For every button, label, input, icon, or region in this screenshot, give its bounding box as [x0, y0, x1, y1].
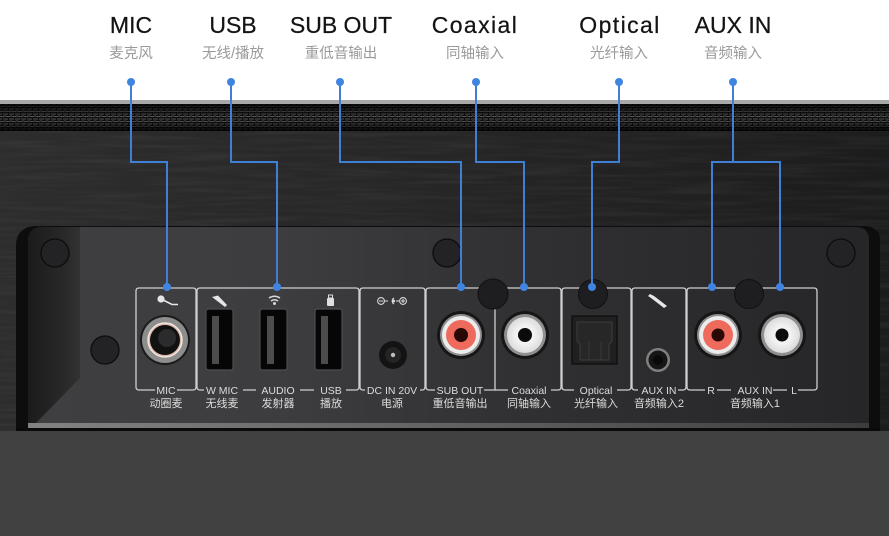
USB port: AUDIO — [260, 309, 287, 370]
label: AUX IN 2: AUX IN — [641, 385, 677, 397]
connector: Coaxial — [472, 78, 528, 291]
label: DC IN 20V: DC IN 20V — [367, 385, 417, 397]
port labels — [150, 385, 797, 410]
label: Coaxial: 同轴输入 — [507, 396, 551, 410]
label: USB: USB — [320, 385, 342, 397]
label: MIC: 动圈麦 — [150, 397, 182, 410]
heading: MIC: 麦克风 — [109, 45, 153, 62]
AUX 2 jack — [646, 348, 670, 372]
heading labels — [109, 12, 771, 62]
heading: AUX IN — [695, 12, 771, 62]
connector: MIC — [127, 78, 171, 291]
label: SUB OUT: SUB OUT — [437, 385, 484, 397]
MIC jack — [140, 315, 190, 365]
label: AUX IN 2 — [634, 385, 684, 410]
heading: SUB OUT: SUB OUT — [290, 12, 392, 38]
recessed connector panel — [16, 226, 880, 431]
USB port: W MIC — [206, 309, 233, 370]
blanking plugs — [478, 279, 764, 309]
label: USB — [320, 385, 342, 410]
wood cabinet — [0, 131, 889, 431]
label: AUDIO — [261, 385, 295, 410]
label: W MIC — [206, 385, 238, 410]
label: SUB OUT — [432, 385, 488, 410]
label: W MIC: W MIC — [206, 385, 238, 397]
heading: USB: 无线/播放 — [202, 45, 265, 62]
connector: Optical — [588, 78, 623, 291]
icon: AUX cable — [648, 294, 667, 308]
label: AUX IN 1: 音频输入1 — [730, 396, 780, 410]
heading: SUB OUT: 重低音输出 — [305, 45, 377, 62]
label: AUX IN 1 — [730, 385, 780, 410]
heading: Optical: 光纤输入 — [590, 45, 648, 62]
USB ports — [206, 309, 342, 370]
heading: Optical — [579, 12, 661, 62]
connector: SUB OUT — [336, 78, 465, 291]
fabric grille strip — [0, 100, 889, 131]
callout lines — [127, 78, 784, 291]
heading: MIC: MIC — [110, 12, 152, 38]
label: DC IN 20V: 电源 — [381, 396, 403, 410]
label: AUX L: L — [791, 385, 797, 397]
label: Optical: 光纤输入 — [574, 396, 618, 410]
label: AUX IN 1: AUX IN — [737, 385, 773, 397]
port group outlines — [136, 288, 817, 390]
USB port: USB — [315, 309, 342, 370]
label: W MIC: 无线麦 — [206, 396, 238, 410]
connector: USB — [227, 78, 281, 291]
mounting screws — [41, 239, 855, 364]
label: Coaxial — [507, 385, 551, 410]
label: SUB OUT: 重低音输出 — [432, 396, 488, 410]
heading: SUB OUT — [290, 12, 392, 62]
heading: MIC — [109, 12, 153, 62]
icon: microphone — [157, 295, 178, 304]
DC power jack — [379, 341, 407, 369]
label: AUX R: R — [707, 385, 715, 397]
heading: Coaxial — [432, 12, 518, 62]
label: AUX IN 2: 音频输入2 — [634, 396, 684, 410]
heading: AUX IN: AUX IN — [695, 12, 771, 38]
heading: USB: USB — [209, 12, 257, 38]
heading: Coaxial: Coaxial — [432, 12, 518, 38]
label: AUDIO: 发射器 — [262, 396, 294, 410]
label: MIC: MIC — [156, 385, 176, 397]
RCA jack: AUX L — [758, 311, 806, 359]
icon: USB stick — [327, 295, 334, 306]
icon: DC polarity — [378, 298, 406, 304]
label: Coaxial: Coaxial — [511, 385, 547, 397]
label: AUDIO: AUDIO — [261, 385, 295, 397]
heading: Optical: Optical — [579, 12, 661, 38]
RCA jack: Coaxial — [501, 311, 549, 359]
label: DC IN 20V — [367, 385, 417, 410]
heading: AUX IN: 音频输入 — [704, 45, 762, 62]
connector: AUX IN — [708, 78, 784, 291]
RCA jack: SUB OUT — [437, 311, 485, 359]
label: Optical: Optical — [580, 385, 612, 397]
label: USB: 播放 — [320, 396, 342, 410]
heading: USB — [202, 12, 265, 62]
icon: wifi audio — [269, 296, 280, 304]
heading: Coaxial: 同轴输入 — [446, 45, 504, 62]
icon: wireless microphone — [212, 296, 227, 307]
label: Optical — [574, 385, 618, 410]
lower cabinet face — [0, 431, 889, 536]
label: MIC — [150, 385, 182, 410]
RCA jack: AUX R — [694, 311, 742, 359]
optical port — [572, 316, 617, 364]
